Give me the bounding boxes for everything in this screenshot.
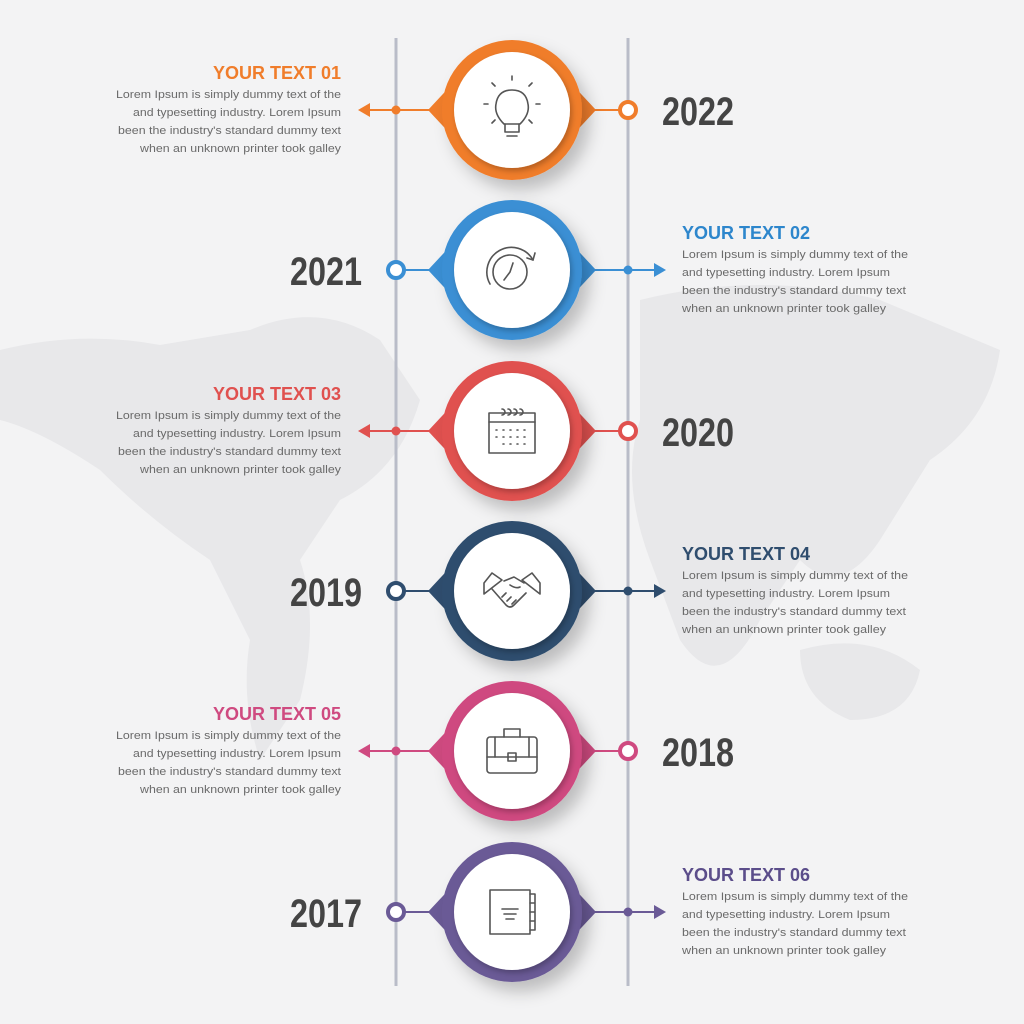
body text: been the industry's standard dummy text xyxy=(682,285,906,297)
title text: YOUR TEXT 03 xyxy=(213,384,341,404)
body text xyxy=(681,570,908,636)
body text xyxy=(116,730,342,796)
world map silhouette xyxy=(0,285,1000,760)
connector xyxy=(358,423,636,439)
icon: briefcase xyxy=(487,729,537,773)
body text: been the industry's standard dummy text xyxy=(118,446,341,458)
body text: been the industry's standard dummy text xyxy=(682,927,906,939)
body text: when an unknown printer took galley xyxy=(139,143,342,155)
item 1: 2022 xyxy=(116,40,734,180)
item 2: 2021 xyxy=(290,200,908,340)
body text: and typesetting industry. Lorem Ipsum xyxy=(682,267,890,279)
body text: Lorem Ipsum is simply dummy text of the xyxy=(682,249,908,261)
connector xyxy=(388,583,666,599)
body text: and typesetting industry. Lorem Ipsum xyxy=(133,107,341,119)
circle xyxy=(428,40,596,180)
body text xyxy=(681,249,908,315)
circle xyxy=(428,842,596,982)
connector xyxy=(388,262,666,278)
body text: Lorem Ipsum is simply dummy text of the xyxy=(682,891,908,903)
icon: calendar xyxy=(489,409,535,453)
title text: YOUR TEXT 06 xyxy=(682,865,810,885)
year: 2020 xyxy=(662,411,734,455)
icon: lightbulb xyxy=(484,76,540,136)
body text: and typesetting industry. Lorem Ipsum xyxy=(682,588,890,600)
connector xyxy=(388,904,666,920)
circle xyxy=(428,681,596,821)
year: 2022 xyxy=(662,90,734,134)
connector xyxy=(358,102,636,118)
connector xyxy=(358,743,636,759)
circle xyxy=(428,521,596,661)
item 6: 2017 xyxy=(290,842,908,982)
body text: when an unknown printer took galley xyxy=(681,303,887,315)
body text: when an unknown printer took galley xyxy=(139,784,342,796)
body text xyxy=(116,410,342,476)
body text xyxy=(681,891,908,957)
icon: handshake xyxy=(484,573,540,607)
year: 2021 xyxy=(290,250,362,294)
body text xyxy=(116,89,342,155)
title text: YOUR TEXT 01 xyxy=(213,63,341,83)
body text: when an unknown printer took galley xyxy=(139,464,342,476)
title text: YOUR TEXT 02 xyxy=(682,223,810,243)
year: 2018 xyxy=(662,731,734,775)
year: 2017 xyxy=(290,892,362,936)
body text: Lorem Ipsum is simply dummy text of the xyxy=(682,570,908,582)
item 5: 2018 xyxy=(116,681,734,821)
vertical timeline lines xyxy=(394,38,398,986)
body text: and typesetting industry. Lorem Ipsum xyxy=(133,428,341,440)
body text: Lorem Ipsum is simply dummy text of the xyxy=(116,89,341,101)
circle xyxy=(428,361,596,501)
body text: when an unknown printer took galley xyxy=(681,945,887,957)
title text: YOUR TEXT 04 xyxy=(682,544,810,564)
body text: Lorem Ipsum is simply dummy text of the xyxy=(116,410,341,422)
body text: been the industry's standard dummy text xyxy=(118,766,341,778)
year: 2019 xyxy=(290,571,362,615)
item 4: 2019 xyxy=(290,521,908,661)
body text: and typesetting industry. Lorem Ipsum xyxy=(682,909,890,921)
item 3: 2020 xyxy=(116,361,734,501)
body text: when an unknown printer took galley xyxy=(681,624,887,636)
icon: clock refresh xyxy=(487,247,535,289)
body text: Lorem Ipsum is simply dummy text of the xyxy=(116,730,341,742)
title text: YOUR TEXT 05 xyxy=(213,704,341,724)
circle xyxy=(428,200,596,340)
body text: been the industry's standard dummy text xyxy=(118,125,341,137)
body text: been the industry's standard dummy text xyxy=(682,606,906,618)
body text: and typesetting industry. Lorem Ipsum xyxy=(133,748,341,760)
icon: notebook xyxy=(490,890,535,934)
